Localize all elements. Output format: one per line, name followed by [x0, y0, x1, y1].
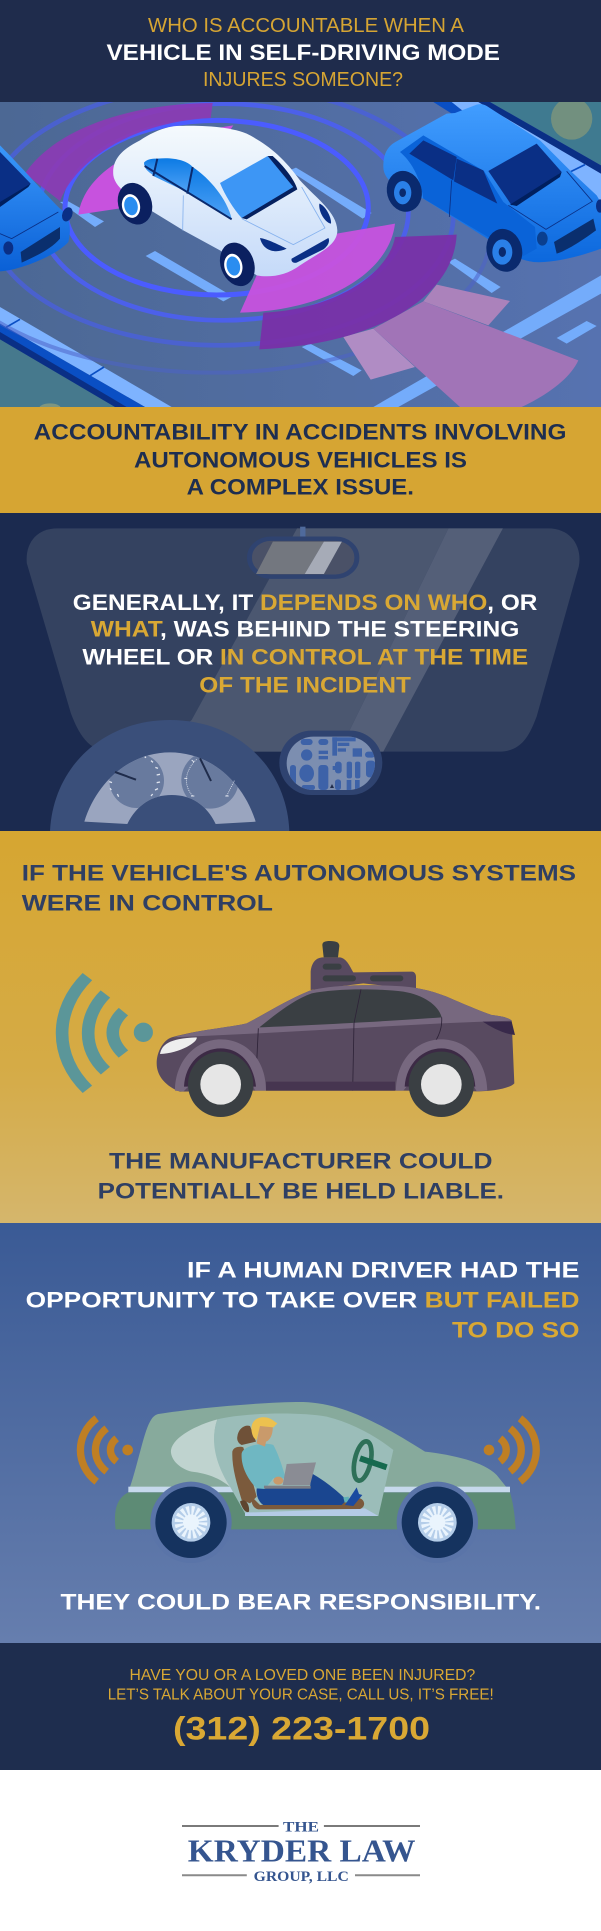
call to action text: LET’S TALK ABOUT YOUR CASE, CALL US, IT’S FREE! — [108, 1686, 494, 1703]
panel: gold statement — [0, 407, 601, 513]
panel: hero illustration of sensing car in a parking lot — [0, 85, 601, 413]
body text: OF THE INCIDENT — [199, 673, 412, 698]
panel: call to action — [0, 1643, 601, 1770]
roof sensor — [311, 941, 416, 990]
logo: The Kryder Law Group: GROUP, LLC — [254, 1869, 349, 1885]
body text — [73, 590, 538, 698]
heading: question: INJURES SOMEONE? — [203, 69, 403, 91]
white car — [112, 126, 337, 291]
call to action text — [108, 1667, 494, 1703]
statement text — [34, 419, 566, 500]
autonomous car illustration — [157, 941, 515, 1117]
radar rings — [0, 85, 490, 373]
parking lines — [60, 168, 601, 407]
icon: wireless signal — [62, 977, 153, 1089]
steering wheel — [351, 1440, 387, 1482]
front wheel — [150, 1482, 232, 1563]
cabin opening — [171, 1414, 393, 1516]
phone number: (312) 223-1700 — [173, 1710, 430, 1746]
windshield — [27, 528, 579, 752]
section conclusion: THEY COULD BEAR RESPONSIBILITY. — [60, 1589, 541, 1614]
windshield glass and mirror — [27, 527, 579, 752]
icon: left signal — [80, 1418, 133, 1482]
driver on seat with laptop — [232, 1417, 364, 1512]
call to action text: HAVE YOU OR A LOVED ONE BEEN INJURED? — [130, 1667, 476, 1684]
section conclusion: THE MANUFACTURER COULD — [109, 1148, 492, 1173]
car body — [157, 985, 515, 1092]
purple sensor wedges — [25, 103, 457, 349]
section heading: WERE IN CONTROL — [22, 890, 273, 915]
heading: question: VEHICLE IN SELF-DRIVING MODE — [106, 40, 500, 65]
blue car left — [0, 145, 75, 271]
panel: human driver could take over — [0, 1223, 601, 1643]
body text: GENERALLY, IT DEPENDS ON WHO , OR — [73, 590, 538, 615]
front wheel — [175, 1039, 266, 1117]
statement text: ACCOUNTABILITY IN ACCIDENTS INVOLVING — [34, 419, 566, 444]
rear-view mirror — [250, 527, 357, 577]
body text: WHAT , WAS BEHIND THE STEERING — [91, 617, 519, 642]
bottom-left kerb and verge — [0, 307, 172, 413]
panel: header — [0, 0, 601, 102]
panel: footer with logo — [0, 1770, 601, 1931]
car body — [115, 1402, 516, 1529]
light beams — [343, 285, 578, 407]
logo: The Kryder Law Group: KRYDER LAW — [188, 1832, 416, 1868]
car with distracted driver illustration — [80, 1402, 536, 1563]
section heading: TO DO SO — [452, 1318, 580, 1343]
rear wheel — [397, 1482, 478, 1563]
logo: The Kryder Law Group: THE — [283, 1820, 319, 1836]
dashboard illustration — [50, 720, 382, 831]
navigation map — [279, 731, 382, 795]
section heading: IF THE VEHICLE'S AUTONOMOUS SYSTEMS — [22, 860, 576, 885]
section heading: OPPORTUNITY TO TAKE OVER BUT FAILED — [26, 1288, 579, 1313]
heading: question — [106, 15, 500, 91]
body text: WHEEL OR IN CONTROL AT THE TIME — [82, 645, 528, 670]
section heading — [26, 1258, 579, 1343]
statement text: A COMPLEX ISSUE. — [187, 475, 414, 500]
rear wheel — [396, 1039, 487, 1117]
panel: windshield view — [0, 513, 601, 831]
section conclusion: POTENTIALLY BE HELD LIABLE. — [98, 1178, 504, 1203]
statement text: AUTONOMOUS VEHICLES IS — [134, 447, 467, 472]
steering wheel and gauges — [50, 720, 289, 831]
blue car right — [382, 104, 601, 276]
heading: question: WHO IS ACCOUNTABLE WHEN A — [148, 15, 465, 37]
section heading — [22, 860, 576, 915]
section conclusion — [98, 1148, 504, 1203]
icon: right signal — [484, 1418, 536, 1482]
panel: autonomous systems in control — [0, 831, 601, 1223]
top-right kerb and verge — [433, 98, 601, 205]
section heading: IF A HUMAN DRIVER HAD THE — [187, 1258, 580, 1283]
logo: The Kryder Law Group — [182, 1820, 420, 1885]
